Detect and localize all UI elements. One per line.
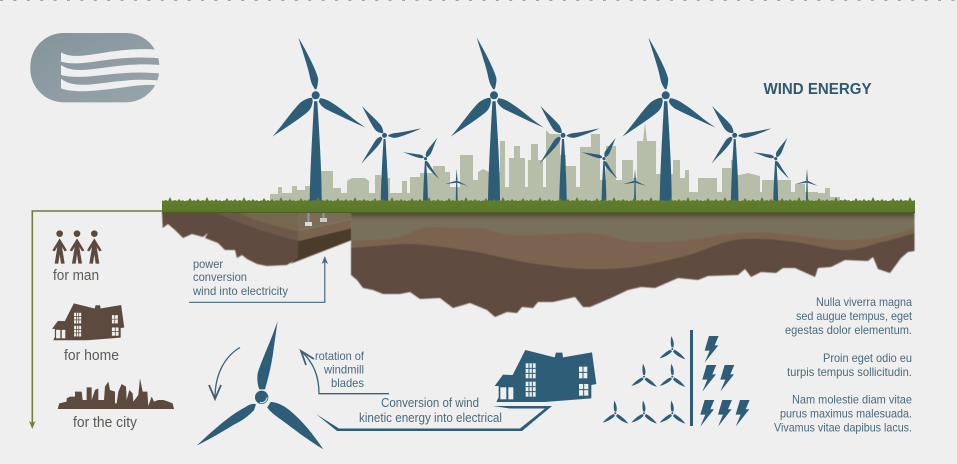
label: power conversion: power (193, 257, 223, 271)
label: rotation of windmill blades (315, 349, 365, 390)
label: power conversion: wind into electricity (192, 284, 288, 298)
turbine: medium 3 (706, 106, 773, 201)
label: conversion of wind: Conversion of wind (381, 395, 479, 410)
turbine: tiny 3 (795, 169, 818, 202)
label: rotation of windmill blades: blades (331, 376, 364, 390)
icon: brown city (58, 378, 174, 409)
turbine: small 2 (580, 138, 627, 201)
label: conversion of wind: kinetic energy into electrical (359, 410, 502, 425)
turbine: small 1 (402, 138, 449, 201)
logo: wind badge (30, 33, 163, 102)
foundation bolts (305, 212, 327, 226)
label: rotation of windmill blades: windmill (323, 362, 364, 376)
text block: right paragraphs (774, 295, 913, 434)
arrow: rotation left (209, 348, 240, 399)
title: WIND ENERGY (764, 81, 872, 98)
icon: turbines pyramid (603, 336, 685, 424)
turbine: tiny 1 (445, 169, 468, 202)
wind turbines (272, 38, 818, 202)
text block: right paragraphs: egestas dolor elementum. (785, 323, 912, 337)
turbine: large 3 (622, 38, 716, 201)
label: for the city: for the city (73, 415, 138, 431)
soil: main block (351, 212, 914, 317)
text block: right paragraphs: Nam molestie diam vitae (792, 392, 912, 406)
label: for man: for man (53, 268, 99, 284)
divider bar: turbines to energy (690, 330, 693, 426)
text block: right paragraphs: turpis tempus sollicitudin. (787, 365, 912, 379)
arrow: rotation right (301, 351, 389, 394)
label: rotation of windmill blades: rotation of (315, 349, 365, 363)
arrow: power conversion (189, 256, 328, 302)
turbine: small 3 (752, 138, 799, 201)
icon: large rotor (197, 321, 323, 449)
label: power conversion: conversion (193, 270, 247, 284)
icon: blue house (495, 350, 596, 402)
turbine: large 2 (451, 38, 544, 201)
soil: cut-away front block (162, 212, 352, 266)
arrow: green supply line (29, 211, 162, 429)
icon: lightning pyramid (700, 336, 750, 427)
text block: right paragraphs: sed augue tempus, eget (796, 309, 913, 323)
text block: right paragraphs: Nulla viverra magna (816, 295, 912, 309)
city skyline (270, 122, 850, 201)
icon: three people (52, 230, 102, 264)
grass strip (162, 197, 915, 213)
turbine: medium 1 (356, 106, 423, 201)
turbine: medium 2 (534, 106, 601, 201)
text block: right paragraphs: purus maximus malesuada. (780, 406, 912, 420)
text block: right paragraphs: Vivamus vitae dapibus lacus. (774, 420, 912, 434)
text block: right paragraphs: Proin eget odio eu (823, 351, 912, 365)
turbine: large 1 (272, 38, 366, 201)
label: conversion of wind (359, 395, 502, 425)
label: for home: for home (64, 348, 119, 364)
turbine: tiny 2 (623, 169, 646, 202)
arrow: conversion bracket (316, 406, 552, 431)
label: power conversion (192, 257, 288, 298)
icon: brown house (52, 303, 124, 340)
